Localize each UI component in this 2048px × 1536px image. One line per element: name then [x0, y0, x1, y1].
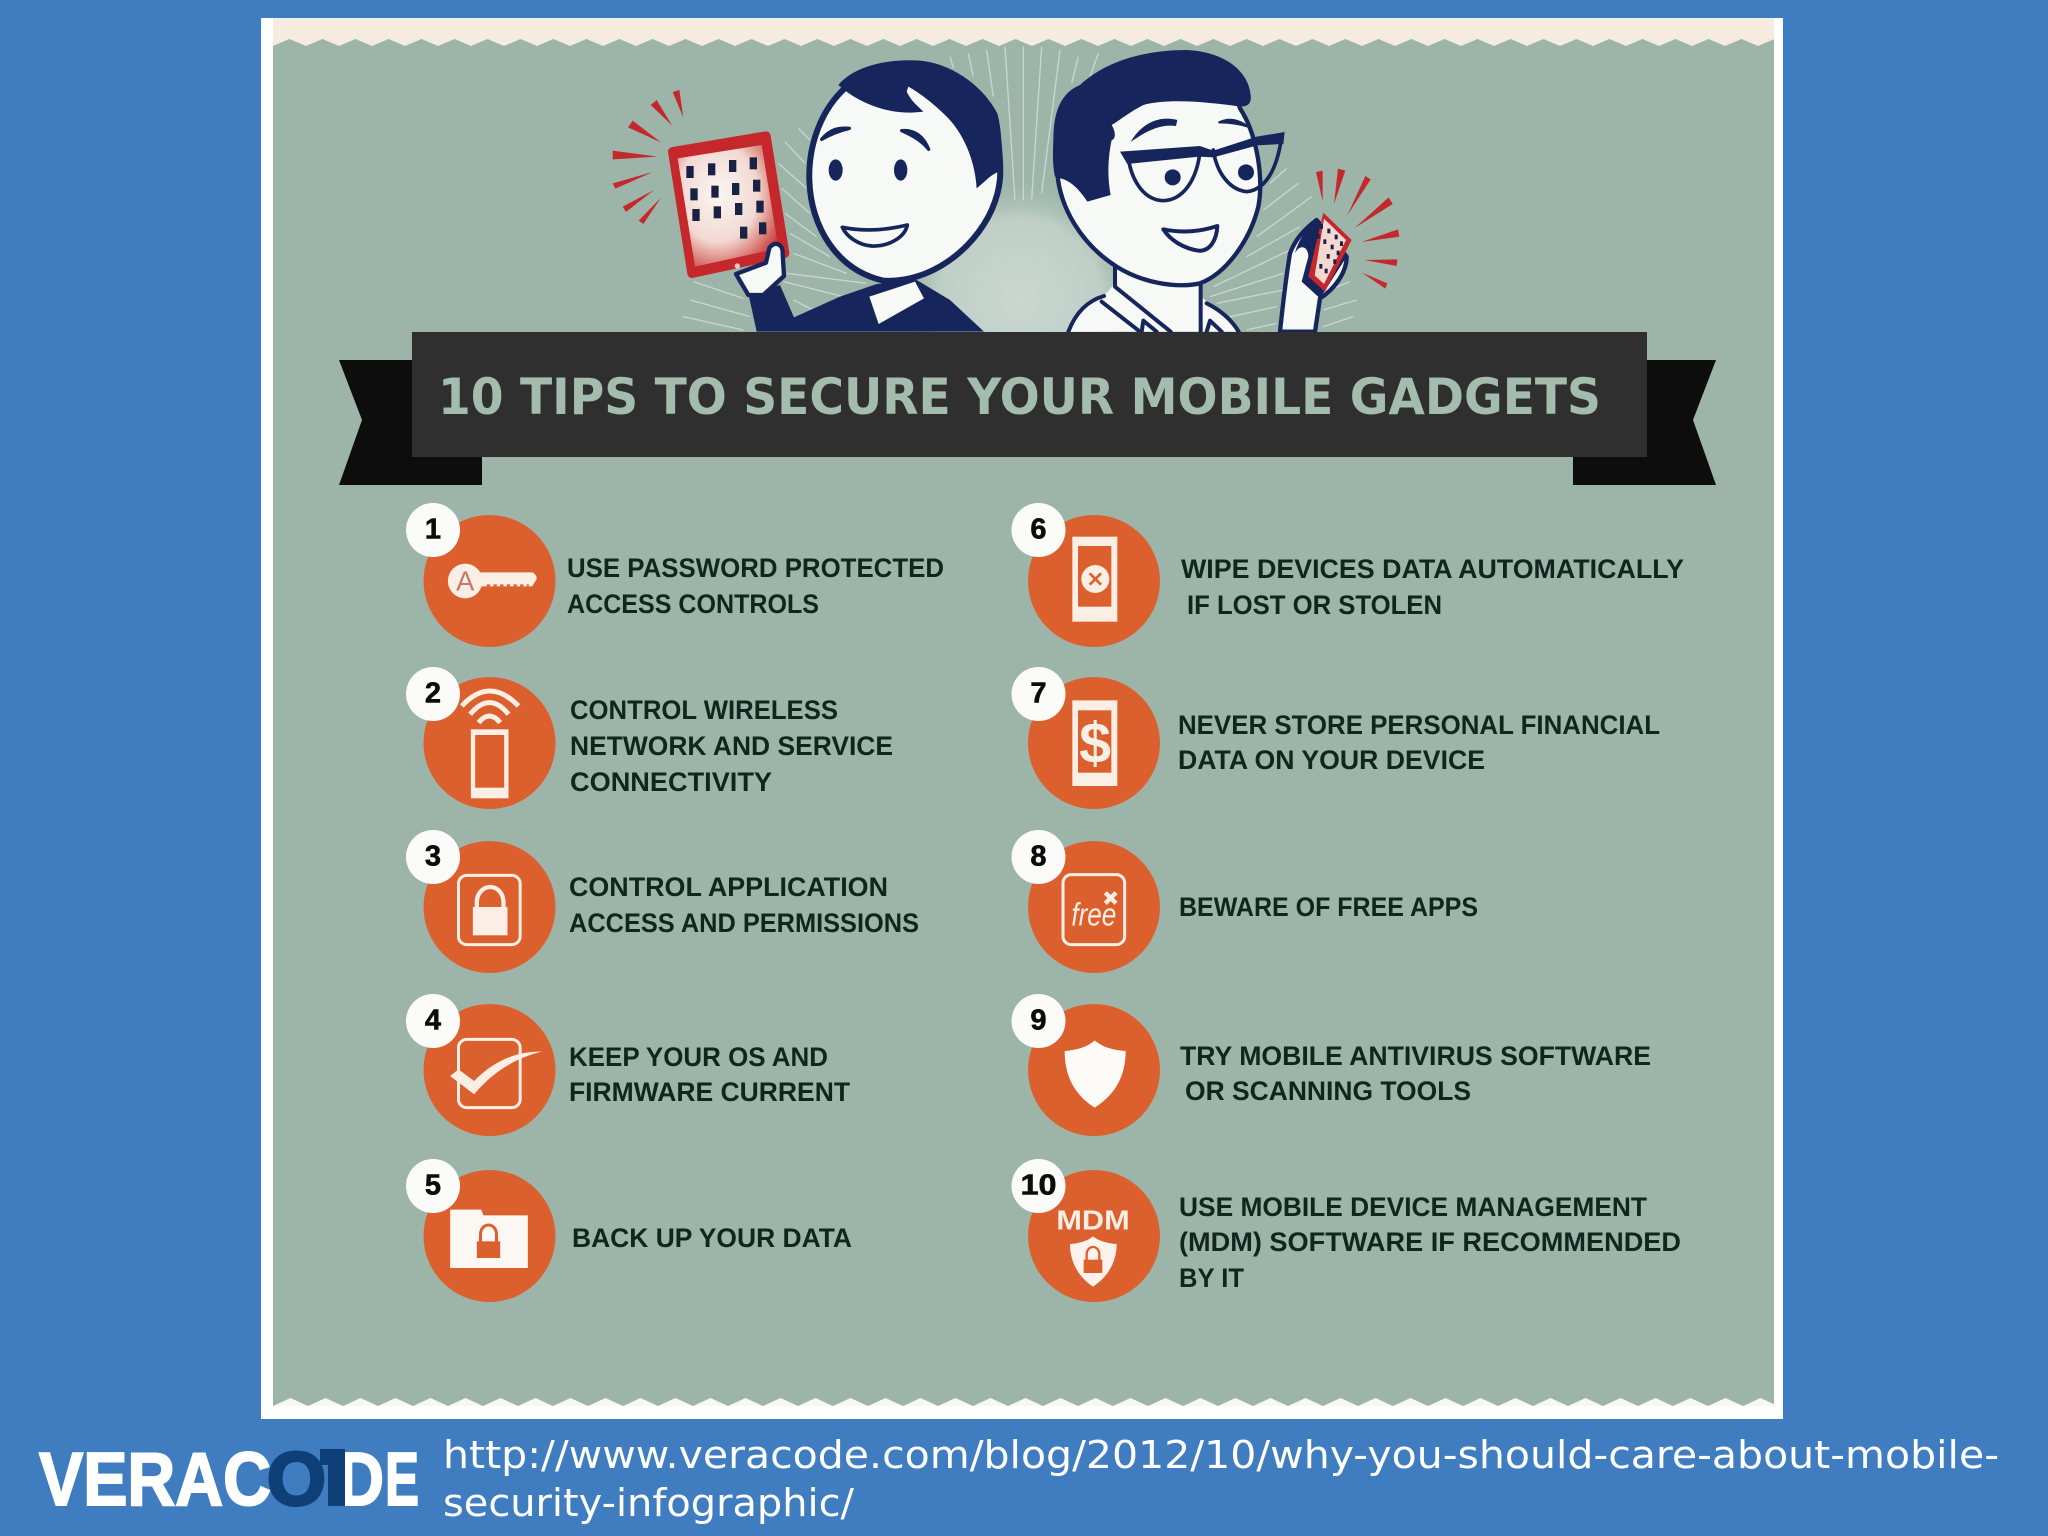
tip text 1 — [567, 553, 944, 619]
red signal lines around phone — [1316, 169, 1399, 289]
number badge 3 — [406, 830, 460, 884]
icon: phone with wifi — [424, 677, 555, 809]
number badge 7: 7 — [1030, 678, 1047, 710]
tip 6: wipe data — [1012, 503, 1684, 647]
tip 4: OS and firmware — [406, 994, 850, 1136]
red signal lines around tablet — [613, 90, 683, 224]
icon: key — [424, 515, 555, 647]
tip text 9: OR SCANNING TOOLS — [1185, 1076, 1471, 1106]
tip text 4: FIRMWARE CURRENT — [569, 1077, 850, 1107]
tip text 7: NEVER STORE PERSONAL FINANCIAL — [1178, 710, 1660, 740]
hand holding phone — [1280, 220, 1347, 332]
source URL — [443, 1433, 1999, 1525]
banner — [412, 332, 1647, 457]
number badge 6: 6 — [1030, 514, 1047, 546]
logo: Veracode — [39, 1437, 419, 1521]
tip text 1: USE PASSWORD PROTECTED — [567, 553, 944, 583]
number badge 4: 4 — [425, 1005, 441, 1037]
tip 9: antivirus — [1012, 994, 1651, 1136]
tip text 10 — [1179, 1192, 1681, 1293]
number badge 5 — [406, 1159, 460, 1213]
hair — [838, 60, 1002, 188]
tip text 10: BY IT — [1179, 1263, 1244, 1293]
logo: Veracode: VERAC — [39, 1437, 271, 1521]
source URL: security-infographic/ — [443, 1481, 854, 1525]
tip text 2: NETWORK AND SERVICE — [570, 731, 893, 761]
number badge 8: 8 — [1030, 841, 1047, 873]
phone — [1308, 213, 1352, 292]
head — [1057, 87, 1260, 285]
illustration: sunburst behind the characters — [683, 47, 1357, 425]
tip 3: application access — [406, 830, 919, 973]
ribbon tail left — [339, 360, 482, 485]
number badge 9 — [1012, 994, 1066, 1048]
title banner ribbon — [339, 332, 1716, 485]
shirt and neck — [1068, 263, 1239, 332]
title: 10 TIPS TO SECURE YOUR MOBILE GADGETS — [438, 368, 1601, 426]
head — [809, 70, 1000, 281]
tip 10: MDM — [1012, 1159, 1681, 1302]
icon: MDM shield: MDM — [1056, 1205, 1130, 1236]
icon: free tag: free — [1071, 896, 1116, 932]
glasses — [1120, 132, 1285, 201]
tip text 3 — [569, 872, 919, 938]
icon: phone with dollar: $ — [1079, 711, 1111, 775]
number badge 6 — [1012, 503, 1066, 557]
logo: Veracode: E — [385, 1437, 419, 1521]
tip 7: financial data — [1012, 667, 1660, 809]
number badge 3: 3 — [425, 841, 441, 873]
number badge 5: 5 — [425, 1170, 441, 1202]
icon: key: A — [456, 565, 475, 596]
hand holding tablet — [736, 244, 784, 295]
icon: lock in frame — [424, 841, 555, 973]
tip text 5: BACK UP YOUR DATA — [572, 1223, 852, 1253]
logo: Veracode: O — [267, 1437, 326, 1521]
tip text 7 — [1178, 710, 1660, 775]
tip text 6: WIPE DEVICES DATA AUTOMATICALLY — [1181, 554, 1684, 584]
number badge 10 — [1012, 1159, 1066, 1213]
logo: Veracode: D — [338, 1437, 384, 1521]
icon: free tag — [1028, 841, 1160, 973]
eyebrows — [822, 128, 929, 149]
icon: locked folder — [424, 1170, 555, 1302]
hair — [1053, 50, 1251, 202]
tip text 2: CONNECTIVITY — [570, 767, 772, 797]
tip text 10: USE MOBILE DEVICE MANAGEMENT — [1179, 1192, 1647, 1222]
mouth — [842, 225, 907, 246]
tip text 6 — [1181, 554, 1684, 620]
tip text 7: DATA ON YOUR DEVICE — [1178, 745, 1485, 775]
tip text 2 — [570, 695, 893, 797]
tip text 2: CONTROL WIRELESS — [570, 695, 838, 725]
tip text 4: KEEP YOUR OS AND — [569, 1042, 828, 1072]
ribbon tail right — [1573, 360, 1716, 485]
tip text 3: ACCESS AND PERMISSIONS — [569, 908, 919, 938]
eyes — [1165, 164, 1254, 185]
icon: checkbox — [424, 1004, 555, 1136]
number badge 8 — [1012, 830, 1066, 884]
tip text 9: TRY MOBILE ANTIVIRUS SOFTWARE — [1180, 1041, 1651, 1071]
number badge 10: 10 — [1020, 1170, 1056, 1202]
jacket — [748, 280, 984, 332]
tip text 10: (MDM) SOFTWARE IF RECOMMENDED — [1179, 1227, 1681, 1257]
eyes — [829, 159, 907, 181]
number badge 1: 1 — [425, 514, 441, 546]
icon: shield — [1028, 1004, 1160, 1136]
tablet — [673, 136, 785, 273]
eyebrows — [1131, 119, 1252, 142]
tip 2: wireless — [406, 667, 893, 809]
icon: MDM shield — [1028, 1170, 1160, 1302]
shirt collar — [869, 282, 924, 324]
tip text 6: IF LOST OR STOLEN — [1187, 590, 1442, 620]
number badge 2 — [406, 667, 460, 721]
tip text 1: ACCESS CONTROLS — [567, 589, 819, 619]
number badge 2: 2 — [425, 678, 441, 710]
tip text 8: BEWARE OF FREE APPS — [1179, 892, 1478, 922]
source URL: http://www.veracode.com/blog/2012/10/why-you-should-care-about-mobile- — [443, 1433, 1999, 1477]
illustration: man with glasses and phone — [1053, 50, 1399, 332]
number badge 7 — [1012, 667, 1066, 721]
tip text 4 — [569, 1042, 850, 1107]
tip text 3: CONTROL APPLICATION — [569, 872, 888, 902]
tip 8: free apps — [1012, 830, 1478, 973]
icon: phone with cross — [1028, 515, 1160, 647]
number badge 1 — [406, 503, 460, 557]
tip 1: password — [406, 503, 944, 647]
illustration: man with tablet — [613, 60, 1002, 332]
mouth — [1163, 226, 1217, 251]
icon: phone with dollar — [1028, 677, 1160, 809]
number badge 9: 9 — [1030, 1005, 1047, 1037]
tip text 9 — [1180, 1041, 1651, 1106]
tip 5: back up — [406, 1159, 852, 1302]
number badge 4 — [406, 994, 460, 1048]
panel: infographic card — [261, 18, 1783, 1419]
